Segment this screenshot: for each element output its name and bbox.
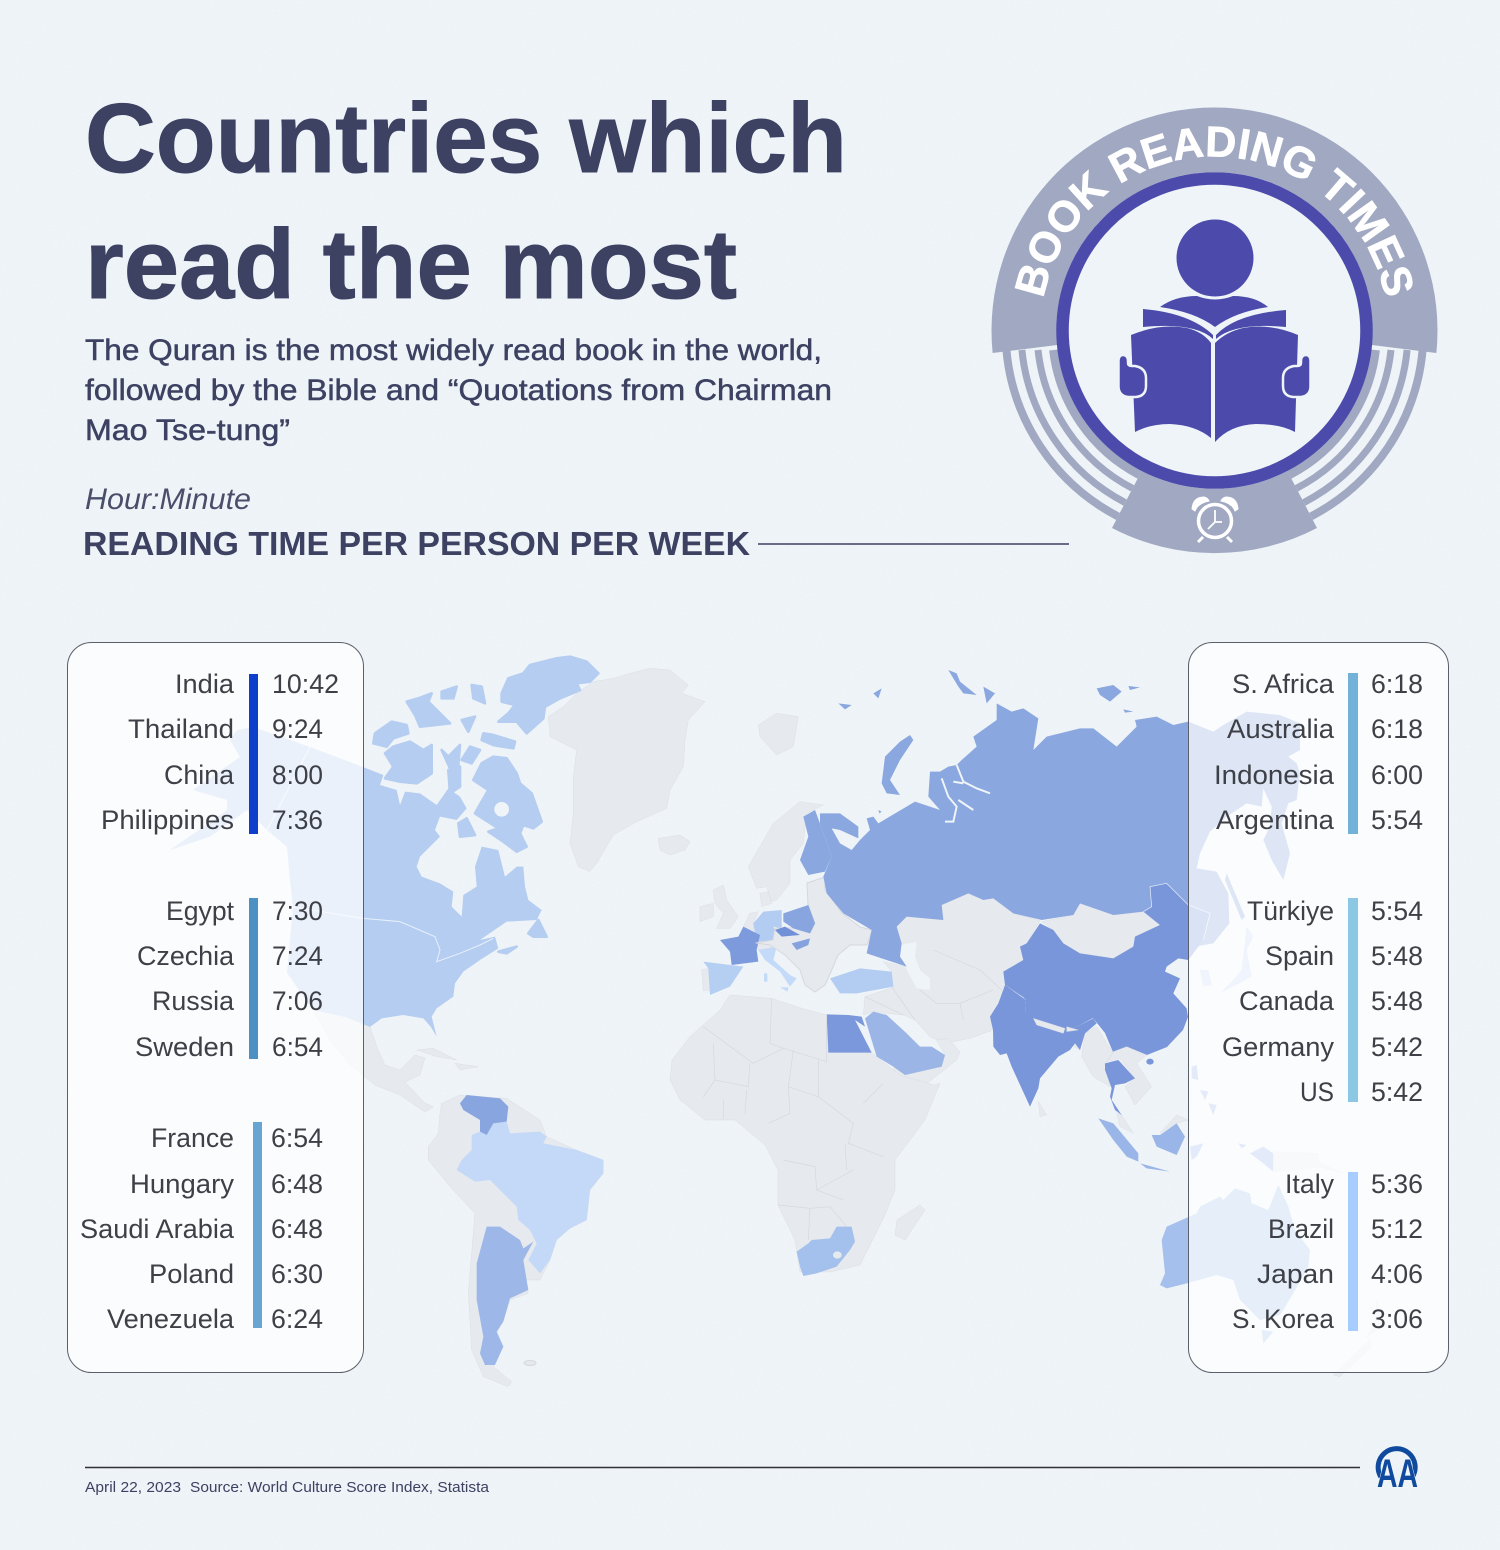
right country names and times: 5:42 — [1371, 1032, 1423, 1062]
Ob and Yenisei gulfs — [942, 765, 990, 822]
right country names and times: Spain — [1265, 941, 1334, 971]
unit label: Hour:Minute — [85, 483, 251, 516]
Lesotho — [833, 1251, 842, 1259]
logo: AA — [1377, 1449, 1418, 1496]
Argentina — [477, 1227, 533, 1365]
left country names and times: 6:30 — [271, 1259, 323, 1289]
Mongolia — [1042, 903, 1160, 958]
Russia — [820, 703, 1300, 967]
African borders — [703, 998, 883, 1240]
shoulders — [1160, 296, 1268, 327]
Egypt — [827, 1014, 872, 1053]
group 6 bar — [1348, 1172, 1358, 1331]
panel box — [68, 642, 364, 1372]
Central Asia borders — [865, 950, 1002, 1020]
badge ring — [1062, 178, 1366, 482]
right country names and times: 4:06 — [1371, 1259, 1423, 1289]
badge stripes — [1006, 350, 1423, 516]
panel: left ranking — [68, 642, 364, 1372]
Southeast Asia mainland — [1038, 1027, 1188, 1133]
Cuba and Hispaniola — [417, 1048, 478, 1070]
icon: alarm clock — [1192, 497, 1238, 542]
Turkey — [830, 968, 893, 993]
left country names and times: 6:48 — [271, 1169, 323, 1199]
upper pages — [1143, 309, 1286, 339]
Foxe Basin — [494, 802, 509, 817]
Central Asia and Middle East — [863, 893, 1040, 1043]
right country names and times: Canada — [1239, 986, 1335, 1016]
Czechia — [775, 927, 800, 937]
right country names and times: 5:54 — [1371, 896, 1423, 926]
left country names and times: 6:54 — [272, 1032, 323, 1062]
Yemen and Oman — [893, 1038, 960, 1090]
left country names and times: Hungary — [130, 1169, 235, 1199]
Philippines — [1192, 1065, 1217, 1115]
Korea and Japan — [1200, 927, 1253, 993]
right country names and times: 5:12 — [1371, 1214, 1423, 1244]
badge: book reading times — [992, 108, 1438, 554]
Hungary — [792, 938, 810, 950]
title: Countries which — [85, 83, 847, 193]
right country names and times: 5:48 — [1371, 941, 1423, 971]
right country names and times: US — [1300, 1077, 1334, 1107]
Saudi Arabia — [865, 1012, 945, 1075]
left country names and times: Saudi Arabia — [80, 1214, 235, 1244]
hands — [1118, 355, 1310, 397]
US-Canada border — [267, 747, 493, 962]
right country names and times: Italy — [1285, 1169, 1334, 1199]
left country names and times: Venezuela — [107, 1304, 235, 1334]
title: read the most — [85, 209, 737, 319]
left country names and times: 7:36 — [272, 805, 323, 835]
group 5 bar — [1348, 898, 1358, 1102]
right country names and times: 5:42 — [1371, 1077, 1423, 1107]
Eastern Europe — [756, 877, 872, 992]
left country names and times: Egypt — [166, 896, 234, 926]
left country names and times: Russia — [152, 986, 235, 1016]
left country names and times: 7:30 — [272, 896, 323, 926]
head — [1176, 220, 1254, 296]
Madagascar — [895, 1205, 925, 1240]
open book — [1131, 327, 1298, 442]
subtitle: The Quran is the most widely read book in the world, — [85, 334, 822, 367]
Italy — [758, 947, 797, 992]
China — [1003, 883, 1210, 1055]
left country names and times: 7:24 — [272, 941, 323, 971]
Russian Arctic islands — [838, 670, 1245, 920]
right country names and times: Japan — [1257, 1259, 1334, 1289]
right country names and times: 5:54 — [1371, 805, 1423, 835]
France — [720, 927, 760, 965]
Greenland — [548, 668, 705, 872]
right country names and times: Brazil — [1268, 1214, 1334, 1244]
group 2 bar — [249, 898, 258, 1059]
Finland — [800, 810, 832, 875]
left country names and times: Sweden — [135, 1032, 234, 1062]
India — [990, 985, 1097, 1107]
Spain — [703, 962, 743, 995]
Russia-China border — [1143, 883, 1210, 940]
badge band — [992, 107, 1438, 353]
right country names and times: 3:06 — [1371, 1304, 1423, 1334]
Poland — [783, 905, 815, 933]
right country names and times: Germany — [1222, 1032, 1334, 1062]
badge curved text: BOOK READING TIMES — [1014, 126, 1413, 296]
left country names and times: France — [151, 1123, 234, 1153]
South Africa — [797, 1227, 855, 1276]
group 3 bar — [253, 1122, 262, 1328]
left country names and times: 6:24 — [271, 1304, 323, 1334]
Thailand — [1105, 1060, 1135, 1115]
title — [85, 83, 847, 319]
Indonesia — [1098, 1118, 1273, 1172]
left country names and times: India — [175, 669, 235, 699]
group 4 bar — [1348, 673, 1358, 834]
Australia — [1160, 1185, 1310, 1343]
footer: date and source — [85, 1480, 490, 1496]
right country names and times: Indonesia — [1214, 760, 1335, 790]
right country names and times: 6:18 — [1371, 714, 1423, 744]
left country names and times: Thailand — [128, 714, 234, 744]
panel: right ranking — [1188, 642, 1448, 1372]
Iberia gray and Alpine states — [702, 940, 782, 991]
chart heading: READING TIME PER PERSON PER WEEK — [83, 525, 750, 562]
right country names and times: Türkiye — [1247, 896, 1334, 926]
left country names and times: Philippines — [101, 805, 234, 835]
left country names and times: 7:06 — [272, 986, 323, 1016]
Canadian Arctic islands — [373, 657, 598, 953]
subtitle: Mao Tse-tung” — [85, 414, 290, 447]
Falklands — [524, 1360, 536, 1366]
right country names and times: Argentina — [1216, 805, 1335, 835]
left country names and times: 6:54 — [271, 1123, 323, 1153]
group 1 bar — [249, 674, 258, 834]
Brazil — [457, 1122, 603, 1273]
Nepal and Bhutan — [1033, 1018, 1078, 1033]
footer: date and source: Source: World Culture Score Index, Statista — [190, 1480, 490, 1496]
subtitle: followed by the Bible and “Quotations from Chairman — [85, 374, 832, 407]
badge lower sector — [1112, 471, 1317, 553]
North America, Greenland and Atlantic islands — [170, 657, 823, 1037]
logo: AA: AA — [1377, 1452, 1418, 1496]
right country names and times: 6:18 — [1371, 669, 1423, 699]
right country names and times: 5:48 — [1371, 986, 1423, 1016]
Mexico and Central America — [313, 1010, 433, 1112]
world map — [170, 657, 1382, 1387]
right country names and times: 5:36 — [1371, 1169, 1423, 1199]
right country names and times — [1214, 669, 1423, 1334]
panel box — [1188, 642, 1448, 1372]
right country names and times: S. Africa — [1232, 669, 1335, 699]
Caspian Sea — [900, 942, 930, 990]
left country names and times: 8:00 — [272, 760, 323, 790]
subtitle — [85, 334, 832, 447]
Germany — [753, 910, 782, 942]
left country names and times — [80, 669, 339, 1334]
left country names and times: 10:42 — [272, 669, 339, 699]
Africa — [670, 995, 940, 1272]
right country names and times: Australia — [1227, 714, 1335, 744]
footer: date and source: April 22, 2023 — [85, 1480, 181, 1496]
right country names and times: 6:00 — [1371, 760, 1423, 790]
Venezuela — [460, 1095, 508, 1135]
left country names and times: Poland — [149, 1259, 234, 1289]
right country names and times: S. Korea — [1232, 1304, 1335, 1334]
icon: reader — [1118, 220, 1310, 442]
left country names and times: 6:48 — [271, 1214, 323, 1244]
Papua New Guinea — [1273, 1152, 1343, 1173]
New Zealand — [1333, 1300, 1382, 1377]
South America — [428, 1095, 603, 1387]
left country names and times: 9:24 — [272, 714, 323, 744]
Canada and United States — [170, 727, 542, 1037]
Hainan — [1146, 1059, 1154, 1065]
left country names and times: China — [164, 760, 235, 790]
left country names and times: Czechia — [137, 941, 235, 971]
Iceland, Svalbard, UK, Ireland, Scandinavia — [658, 713, 823, 942]
